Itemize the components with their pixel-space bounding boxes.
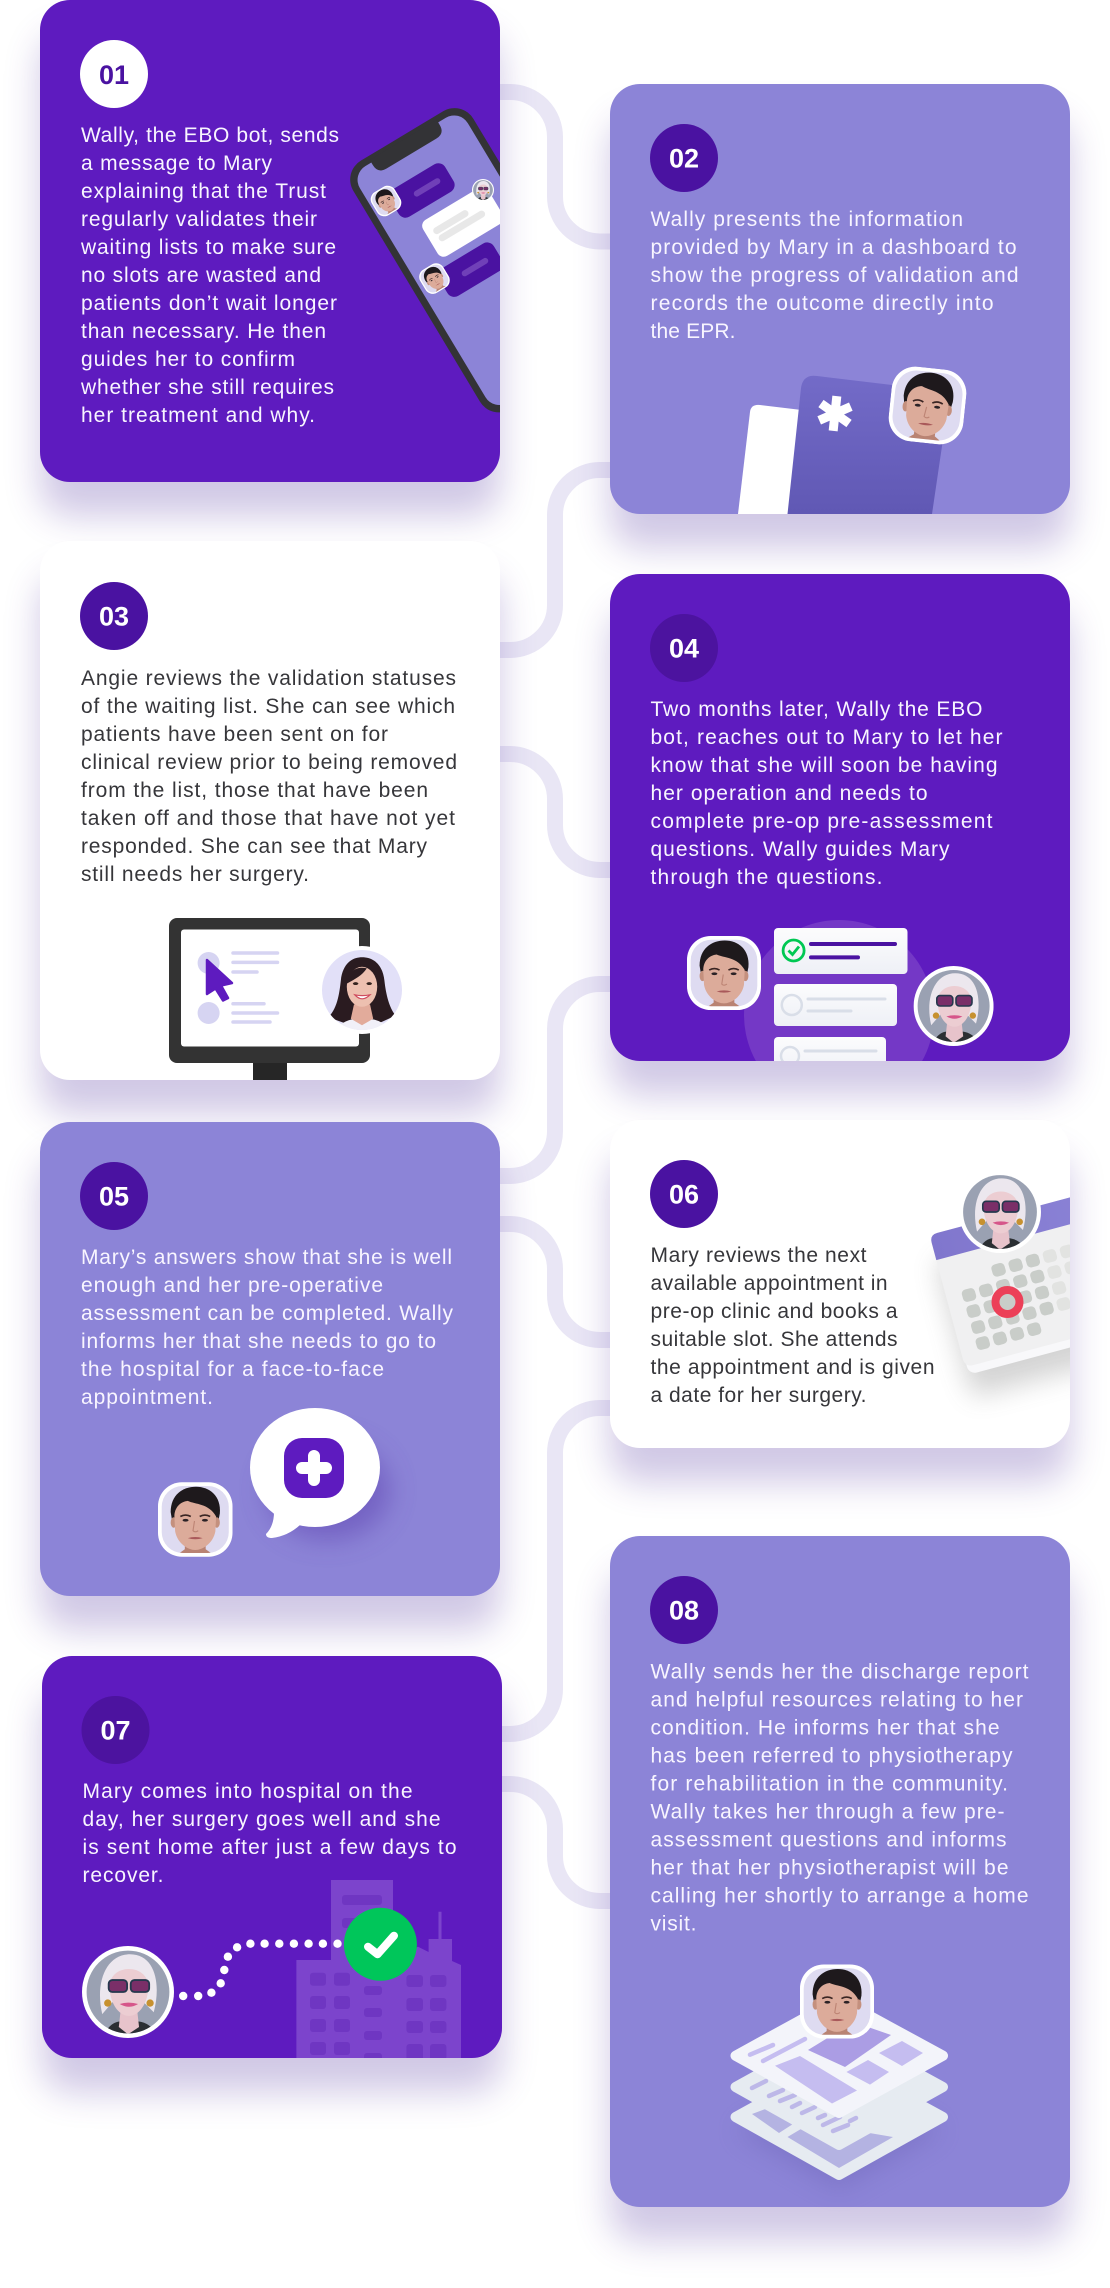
text: step 02: records the outcome directly into: [650, 292, 994, 315]
badge 04: 04: [669, 634, 699, 664]
text: step 06: available appointment in: [650, 1272, 888, 1295]
badge 03: 03: [99, 602, 129, 632]
text: step 08: [650, 1660, 1029, 1936]
text: step 01: than necessary. He then: [81, 320, 326, 343]
text: step 05: appointment.: [81, 1386, 213, 1409]
text: step 01: whether she still requires: [80, 376, 334, 399]
text: step 06: suitable slot. She attends: [650, 1328, 898, 1351]
text: step 01: regularly validates their: [81, 208, 317, 231]
text: step 06: a date for her surgery.: [650, 1384, 866, 1407]
icon: phone with chat: [350, 108, 500, 412]
panel: step 08: [610, 1536, 1070, 2241]
card background: [40, 1122, 500, 1596]
text: step 03: Angie reviews the validation statuses: [81, 667, 456, 690]
text: step 05: [81, 1246, 454, 1409]
text: step 03: taken off and those that have not yet: [81, 807, 455, 830]
text: step 07: [82, 1780, 456, 1887]
text: step 01: [80, 124, 339, 427]
badge 01: [80, 40, 148, 108]
text: step 04: complete pre-op pre-assessment: [650, 810, 993, 833]
arrow: step 5 to step 6: [500, 1224, 610, 1340]
text: step 01: waiting lists to make sure: [80, 236, 336, 259]
arrow: step 3 to step 4: [500, 754, 610, 870]
panel: step 07: [42, 1656, 502, 2092]
text: step 05: enough and her pre-operative: [81, 1274, 383, 1297]
text: step 04: know that she will soon be having: [650, 754, 998, 777]
icon: patient avatar: [158, 1482, 232, 1557]
text: step 06: the appointment and is given: [650, 1356, 934, 1379]
text: step 04: Two months later, Wally the EBO: [650, 698, 982, 721]
panel: step 03: [40, 541, 500, 1114]
arrow: step 6 to step 7: [502, 1408, 610, 1734]
badge 02: [650, 124, 718, 192]
panel: step 04: [610, 574, 1070, 1110]
icon: hospital building: [296, 1880, 461, 2062]
badge 02: 02: [669, 144, 699, 174]
icon: green check: [344, 1908, 417, 1981]
arrow: step 4 to step 5: [500, 984, 610, 1176]
arrow: step 7 to step 8: [502, 1784, 610, 1901]
badge 07: [82, 1696, 150, 1764]
panel: step 05: [40, 1122, 500, 1630]
text: step 06: Mary reviews the next: [650, 1244, 867, 1267]
card background: [40, 541, 500, 1080]
panel: step 06: [610, 1120, 1110, 1482]
text: step 08: Wally takes her through a few pre-: [650, 1800, 1004, 1824]
badge 06: [650, 1160, 718, 1228]
text: step 04: bot, reaches out to Mary to let her: [650, 726, 1002, 749]
text: step 02: provided by Mary in a dashboard to: [650, 236, 1016, 259]
icon: monitor with cursor and doctor: [169, 918, 406, 1080]
icon: questionnaire checklist with patients: [687, 920, 994, 1061]
badge 07: 07: [100, 1716, 131, 1746]
badge 03: [80, 582, 148, 650]
dotted route: [179, 1940, 342, 2000]
text: step 07: is sent home after just a few days to: [82, 1836, 456, 1859]
panel: step 01: [22, 0, 518, 534]
text: step 08: her that her physiotherapist will be: [650, 1856, 1008, 1880]
text: step 08: and helpful resources relating to her: [650, 1688, 1023, 1712]
icon: stacked report layers: [735, 1999, 943, 2190]
card background: [610, 1536, 1070, 2207]
icon: patient avatar: [800, 1964, 874, 2038]
text: step 01: guides her to confirm: [81, 348, 295, 371]
text: step 06: [650, 1244, 934, 1407]
text: step 04: questions. Wally guides Mary: [650, 838, 950, 861]
text: step 06: pre-op clinic and books a: [650, 1300, 898, 1323]
text: step 05: the hospital for a face-to-face: [81, 1358, 384, 1381]
text: step 02: the EPR.: [650, 320, 736, 343]
badge 01: 01: [99, 60, 129, 90]
icon: speech bubble with medical cross: [250, 1408, 390, 1540]
text: step 03: still needs her surgery.: [81, 863, 309, 886]
text: step 01: no slots are wasted and: [81, 264, 321, 287]
text: step 05: Mary’s answers show that she is well: [81, 1246, 452, 1269]
text: step 07: day, her surgery goes well and she: [82, 1808, 440, 1831]
text: step 03: of the waiting list. She can see which: [81, 695, 455, 718]
badge 05: [80, 1162, 148, 1230]
badge 06: 06: [669, 1180, 699, 1210]
text: step 04: her operation and needs to: [650, 782, 928, 805]
icon: calendar with selected slot: [930, 1175, 1070, 1403]
card background: [42, 1656, 502, 2058]
text: step 01: a message to Mary: [81, 152, 272, 175]
card background: [610, 84, 1070, 514]
text: step 02: [650, 208, 1018, 343]
text: step 02: Wally presents the information: [650, 208, 963, 231]
text: step 01: Wally, the EBO bot, sends: [81, 124, 339, 147]
text: step 03: clinical review prior to being removed: [81, 751, 457, 774]
text: step 08: has been referred to physiotherapy: [650, 1744, 1013, 1768]
card background: [610, 574, 1070, 1061]
text: step 01: patients don’t wait longer: [81, 292, 337, 315]
text: step 02: show the progress of validation and: [650, 264, 1018, 287]
text: step 04: through the questions.: [650, 866, 882, 889]
text: step 08: Wally sends her the discharge report: [650, 1660, 1029, 1684]
arrow: step 2 to step 3: [500, 470, 610, 650]
text: step 08: assessment questions and informs: [650, 1828, 1006, 1852]
icon: patient record documents: [738, 364, 969, 514]
card background: [610, 1120, 1070, 1448]
text: step 05: informs her that she needs to go to: [81, 1330, 436, 1353]
text: step 08: calling her shortly to arrange a home: [650, 1884, 1028, 1908]
text: step 01: explaining that the Trust: [81, 180, 326, 203]
text: step 03: [81, 667, 457, 886]
badge 04: [650, 614, 718, 682]
text: step 08: for rehabilitation in the community.: [650, 1772, 1008, 1796]
badge 05: 05: [99, 1182, 129, 1212]
card background: [40, 0, 500, 482]
text: step 07: Mary comes into hospital on the: [82, 1780, 412, 1803]
arrow: step 1 to step 2: [500, 92, 610, 242]
text: step 04: [650, 698, 1002, 889]
icon: patient avatar: [82, 1946, 174, 2038]
badge 08: 08: [669, 1596, 699, 1626]
text: step 08: visit.: [650, 1912, 696, 1936]
text: step 07: recover.: [82, 1864, 164, 1887]
text: step 01: her treatment and why.: [81, 404, 315, 427]
text: step 03: patients have been sent on for: [81, 723, 388, 746]
text: step 05: assessment can be completed. Wally: [81, 1302, 454, 1325]
panel: step 02: [610, 84, 1070, 548]
connector lines between steps: [500, 92, 610, 1901]
text: step 08: condition. He informs her that she: [650, 1716, 1000, 1740]
text: step 03: from the list, those that have been: [81, 779, 428, 802]
text: step 03: responded. She can see that Mary: [81, 835, 428, 858]
badge 08: [650, 1576, 718, 1644]
